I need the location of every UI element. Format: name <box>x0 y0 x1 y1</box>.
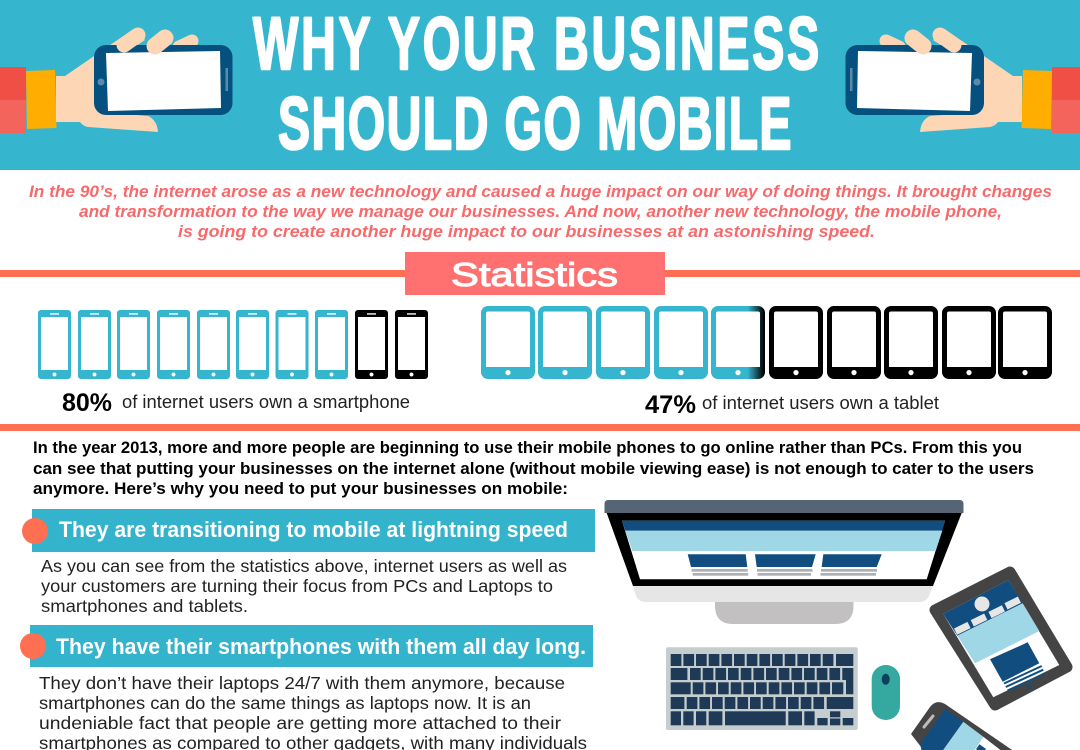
divider band <box>0 424 1080 431</box>
intro text <box>29 182 1052 241</box>
tablet stat caption: of internet users own a tablet <box>702 393 939 413</box>
intro text: is going to create another huge impact to our businesses at an astonishing speed. <box>178 222 875 241</box>
title: WHY YOUR BUSINESS <box>253 4 819 86</box>
smartphone stat caption <box>62 389 410 417</box>
statistics heading band <box>0 252 1080 295</box>
summary paragraph: anymore. Here’s why you need to put your businesses on mobile: <box>33 480 568 498</box>
section 2 text <box>39 673 587 750</box>
section 1 text: smartphones and tablets. <box>41 596 248 616</box>
section 1 text <box>41 556 567 616</box>
section 2 heading: They have their smartphones with them all day long. <box>56 634 586 659</box>
intro text: and transformation to the way we manage our businesses. And now, another new technology, the mobile phone, <box>79 202 1002 221</box>
summary paragraph: can see that putting your businesses on the internet alone (without mobile viewing ease) is not enough to cater to the users <box>33 460 1034 478</box>
title: SHOULD GO MOBILE <box>278 84 792 166</box>
header banner <box>0 0 1080 170</box>
title <box>253 4 819 166</box>
section 1 heading <box>22 509 595 552</box>
smartphone pictogram row: 80% <box>38 310 428 379</box>
tablet stat caption: 47% <box>645 391 696 419</box>
icon: right hand holding phone <box>846 29 1080 133</box>
summary paragraph <box>33 439 1034 498</box>
section 1 text: As you can see from the statistics above, internet users as well as <box>41 556 567 576</box>
statistics heading band: Statistics <box>451 256 618 293</box>
smartphone stat caption: of internet users own a smartphone <box>122 392 410 412</box>
illustration: tablet <box>935 572 1067 705</box>
illustration: desktop monitor <box>604 500 964 624</box>
illustration: smartphone <box>911 702 1015 750</box>
smartphone stat caption: 80% <box>62 389 112 417</box>
section 1 heading: They are transitioning to mobile at lightning speed <box>59 517 568 542</box>
section 2 heading <box>20 625 593 667</box>
section 2 text: undeniable fact that people are getting more attached to their <box>39 713 561 733</box>
tablet stat caption <box>645 391 939 419</box>
intro text: In the 90’s, the internet arose as a new technology and caused a huge impact on our way of doing things. It brought changes <box>29 182 1052 201</box>
illustration: mouse <box>872 665 900 720</box>
section 2 text: smartphones can do the same things as laptops now. It is an <box>39 693 531 713</box>
section 2 text: They don’t have their laptops 24/7 with them anymore, because <box>39 673 565 693</box>
summary paragraph: In the year 2013, more and more people are beginning to use their mobile phones to go online rather than PCs. From this you <box>33 439 1022 457</box>
tablet pictogram row: 47% <box>481 306 1052 379</box>
illustration: keyboard <box>666 647 858 730</box>
section 1 text: your customers are turning their focus from PCs and Laptops to <box>41 576 553 596</box>
icon: left hand holding phone <box>0 29 232 133</box>
